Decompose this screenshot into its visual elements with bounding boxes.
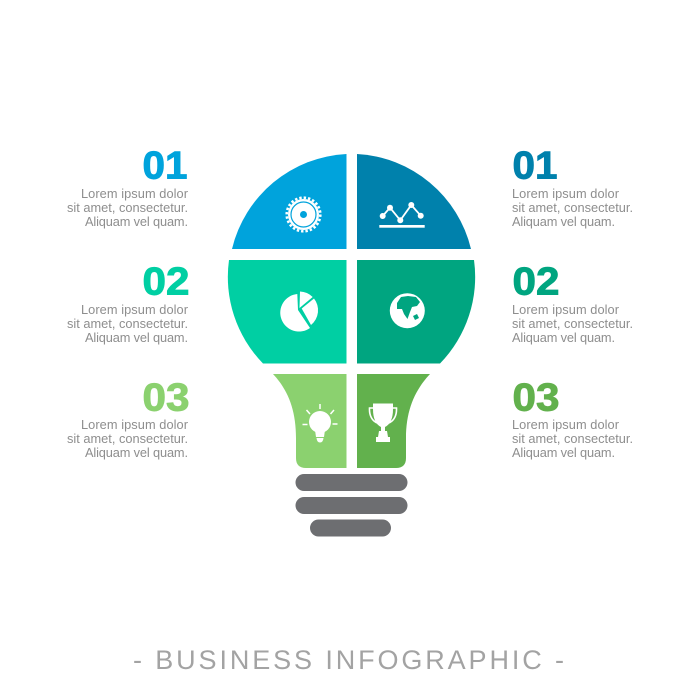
right block 01 (512, 144, 633, 229)
right block 01: sit amet, consectetur. (512, 200, 633, 215)
left block 01: 01 (142, 144, 188, 188)
left block 01 (67, 144, 189, 229)
right block 03: 03 (512, 376, 560, 420)
left block 02: 02 (142, 260, 190, 304)
panel: lower right green (357, 374, 430, 468)
right block 02: sit amet, consectetur. (512, 316, 633, 331)
title: - BUSINESS INFOGRAPHIC - (133, 645, 564, 675)
right block 01: 01 (512, 144, 558, 188)
base bar 1 (296, 474, 408, 491)
left block 03 (67, 376, 190, 460)
left block 02 (67, 260, 190, 345)
icon: globe (390, 293, 425, 328)
right block 01: Lorem ipsum dolor (512, 186, 620, 201)
right block 02: 02 (512, 260, 560, 304)
panel: lower left light green (273, 374, 346, 468)
left block 01: Aliquam vel quam. (85, 214, 188, 229)
left block 03: 03 (142, 376, 190, 420)
left block 02: Aliquam vel quam. (85, 330, 188, 345)
right block 03: Aliquam vel quam. (512, 445, 615, 460)
right block 03 (512, 376, 633, 460)
left block 01: sit amet, consectetur. (67, 200, 188, 215)
icon: trophy (369, 404, 397, 442)
right block 02 (512, 260, 633, 345)
panel: middle right dark teal (357, 260, 475, 364)
left block 01: Lorem ipsum dolor (81, 186, 189, 201)
icon: light bulb with rays (302, 404, 338, 442)
left block 02: sit amet, consectetur. (67, 316, 188, 331)
light bulb (228, 154, 475, 536)
base bar 3 (310, 520, 391, 536)
icon: line chart (379, 202, 425, 228)
right block 01: Aliquam vel quam. (512, 214, 615, 229)
icon: pie chart (280, 292, 318, 332)
left block 02: Lorem ipsum dolor (81, 302, 189, 317)
panel: top right dark blue (357, 154, 471, 249)
left block 03: Lorem ipsum dolor (81, 417, 189, 432)
right block 02: Aliquam vel quam. (512, 330, 615, 345)
left block 03: Aliquam vel quam. (85, 445, 188, 460)
right block 03: sit amet, consectetur. (512, 431, 633, 446)
left block 03: sit amet, consectetur. (67, 431, 188, 446)
right block 02: Lorem ipsum dolor (512, 302, 620, 317)
icon: gear (287, 198, 320, 231)
panel: middle left teal (228, 260, 346, 364)
panel: top left blue (232, 154, 346, 249)
left column of text blocks (67, 144, 190, 460)
right block 03: Lorem ipsum dolor (512, 417, 620, 432)
base bar 2 (296, 497, 408, 514)
right column of text blocks (512, 144, 633, 460)
